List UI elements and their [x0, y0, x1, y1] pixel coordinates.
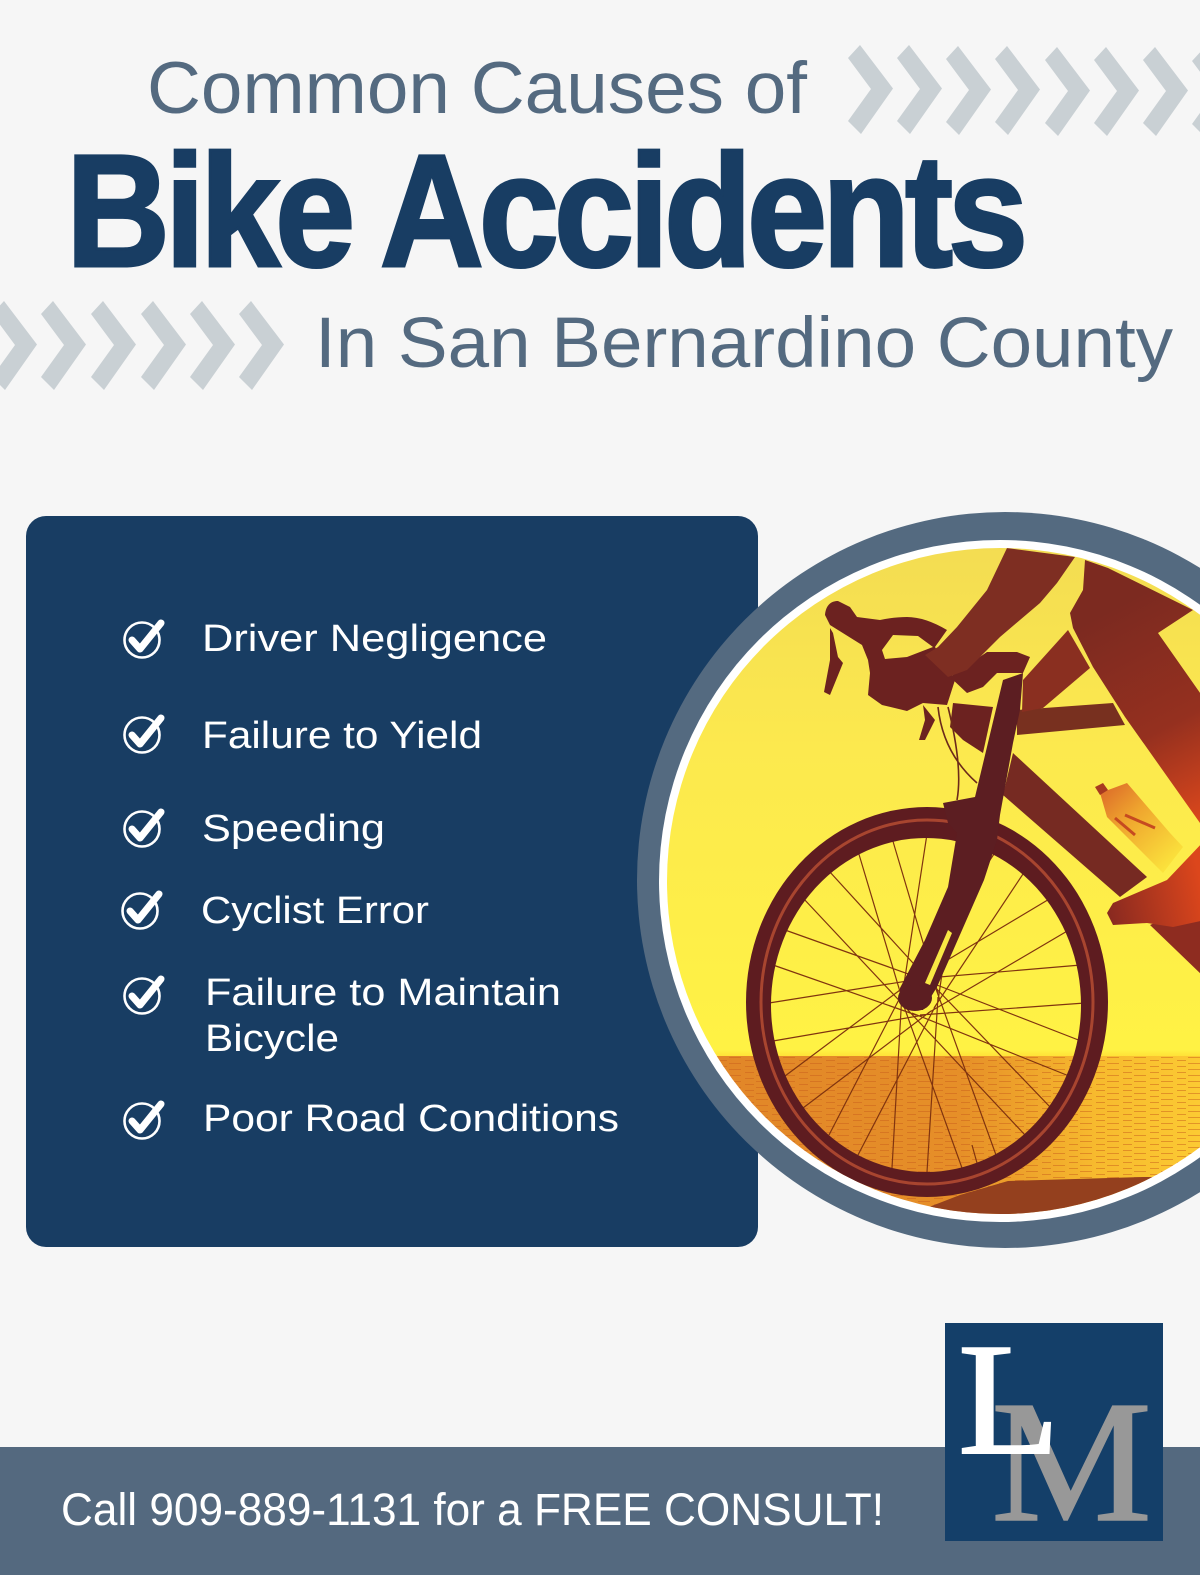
cause: Driver Negligence: Driver Negligence — [202, 618, 547, 660]
cause: Failure to Yield: Failure to Yield — [202, 715, 482, 757]
white inner ring — [659, 540, 1200, 1222]
logo: LM: L — [958, 1310, 1060, 1488]
cause: Speeding: Speeding — [202, 808, 385, 850]
panel: causes list — [26, 516, 758, 1247]
title: Bike Accidents: Bike Accidents — [66, 122, 1028, 301]
leg — [1070, 560, 1200, 830]
cause: Speeding — [124, 808, 385, 850]
chevron row: left — [0, 301, 284, 390]
logo: LM — [945, 1310, 1163, 1558]
arm — [925, 548, 1075, 677]
top tube — [1017, 703, 1125, 735]
brake cables — [938, 707, 977, 800]
fork and head tube — [898, 673, 1023, 1011]
down tube and chain stay — [1003, 753, 1200, 978]
cause: Cyclist Error: Cyclist Error — [201, 890, 429, 932]
handlebar and hand — [824, 601, 1030, 740]
cause: Failure to Maintain Bicycle: Failure to Maintain — [205, 972, 561, 1014]
logo: LM: M — [991, 1365, 1152, 1558]
shoe — [1107, 840, 1200, 927]
circular ring — [637, 512, 1200, 1248]
photo: cyclist at sunset — [660, 540, 1200, 1226]
chevron row: top right — [848, 45, 1200, 137]
wheel — [746, 807, 1108, 1197]
title line: Common Causes of: Common Causes of — [147, 48, 808, 129]
lower hand — [950, 703, 993, 753]
title line: In San Bernardino County: In San Bernardino County — [315, 304, 1174, 383]
rear arm — [1022, 630, 1090, 712]
cause: Failure to Maintain Bicycle — [124, 972, 561, 1060]
footer call to action: Call 909-889-1131 for a FREE CONSULT! — [61, 1484, 884, 1535]
cause: Failure to Maintain Bicycle: Bicycle — [205, 1018, 339, 1060]
cause: Poor Road Conditions: Poor Road Conditions — [203, 1098, 619, 1140]
footer bar — [0, 1447, 1200, 1575]
cause: Cyclist Error — [122, 890, 429, 932]
water bottle — [1095, 783, 1183, 873]
